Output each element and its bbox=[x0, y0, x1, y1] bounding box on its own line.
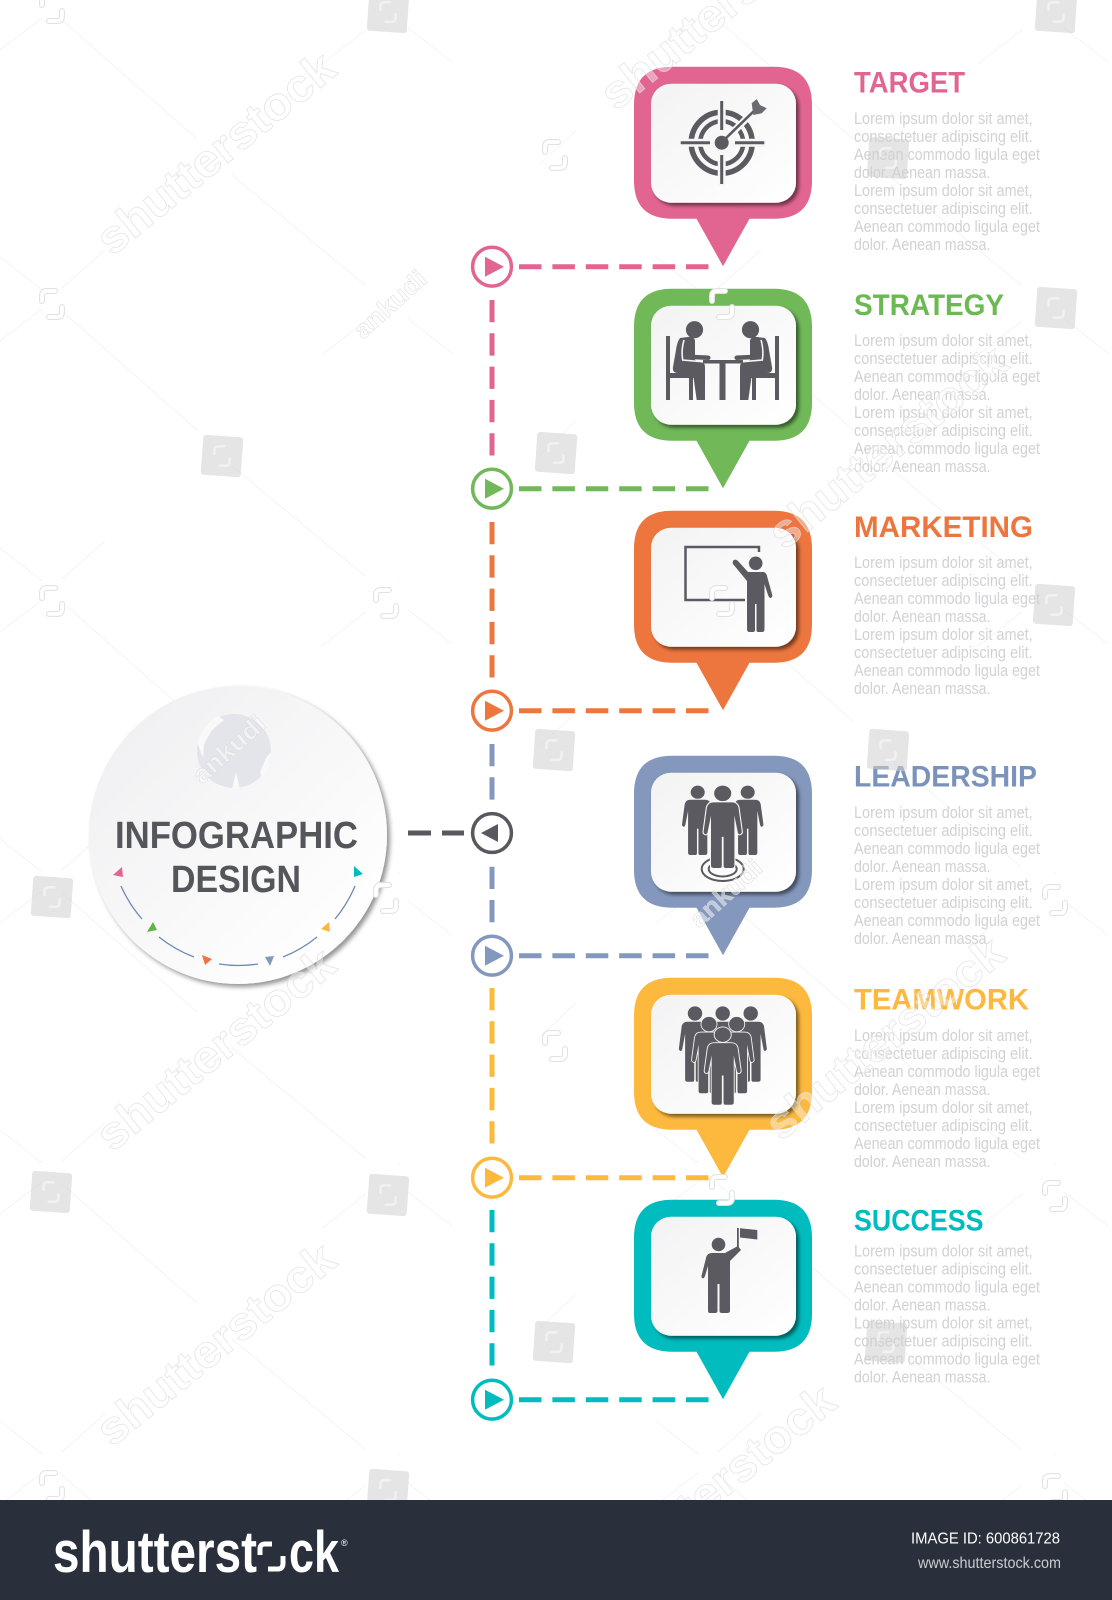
panel: strategy pin bbox=[634, 289, 812, 488]
text: leadership description: Aenean commodo ligula eget bbox=[854, 839, 1040, 858]
text: teamwork description: Lorem ipsum dolor sit amet, bbox=[854, 1026, 1033, 1045]
text: target description: consectetuer adipiscing elit. bbox=[854, 127, 1033, 146]
text: strategy description: Lorem ipsum dolor sit amet, bbox=[854, 331, 1033, 350]
marker: leadership bbox=[473, 936, 511, 975]
watermark: stock text: shutterstock bbox=[86, 40, 346, 265]
icon: team group bbox=[679, 1006, 767, 1105]
text: success description: Lorem ipsum dolor sit amet, bbox=[854, 1242, 1033, 1260]
marker: teamwork bbox=[473, 1158, 511, 1197]
text: success description: Lorem ipsum dolor sit amet, bbox=[854, 1314, 1033, 1332]
footer logo: ® bbox=[341, 1538, 348, 1548]
marker: target bbox=[473, 247, 511, 286]
icon: globe bbox=[197, 714, 271, 789]
marker: marketing bbox=[473, 691, 511, 730]
heading: infographic design: DESIGN bbox=[171, 859, 301, 901]
text: success description: Aenean commodo ligula eget bbox=[854, 1278, 1040, 1296]
icon: presenter at board bbox=[686, 547, 772, 632]
text: target description: dolor. Aenean massa. bbox=[854, 235, 990, 254]
watermark: contributor text: ankudi bbox=[348, 265, 432, 344]
watermark: stock text: shutterstock bbox=[758, 334, 1018, 559]
text: teamwork description bbox=[854, 1026, 1040, 1171]
text: success description: consectetuer adipiscing elit. bbox=[854, 1260, 1033, 1278]
text: leadership description: Lorem ipsum dolor sit amet, bbox=[854, 875, 1033, 894]
icon: leader with team bbox=[682, 786, 763, 881]
text: marketing description: consectetuer adipiscing elit. bbox=[854, 643, 1033, 662]
text: target description: Aenean commodo ligula eget bbox=[854, 217, 1040, 236]
watermark: stock text: shutterstock bbox=[755, 925, 1015, 1150]
text: marketing description: consectetuer adipiscing elit. bbox=[854, 571, 1033, 590]
text: marketing description: Lorem ipsum dolor sit amet, bbox=[854, 625, 1033, 644]
timeline: vertical dashed lines bbox=[490, 300, 494, 1366]
text: marketing description bbox=[854, 553, 1040, 698]
text: target description bbox=[854, 109, 1040, 254]
text: success description bbox=[854, 1242, 1040, 1386]
text: success description: consectetuer adipiscing elit. bbox=[854, 1332, 1033, 1350]
text: target description: Lorem ipsum dolor sit amet, bbox=[854, 109, 1033, 128]
text: teamwork description: dolor. Aenean massa. bbox=[854, 1080, 990, 1099]
text: target description: dolor. Aenean massa. bbox=[854, 163, 990, 182]
icon: target with arrow bbox=[678, 99, 767, 186]
heading: infographic design bbox=[115, 815, 358, 901]
text: target description: Aenean commodo ligula eget bbox=[854, 145, 1040, 164]
text: success description: Aenean commodo ligula eget bbox=[854, 1350, 1040, 1368]
heading: strategy: STRATEGY bbox=[854, 289, 1004, 322]
watermark: stock text: shutterstock bbox=[86, 1231, 346, 1456]
text: target description: Lorem ipsum dolor sit amet, bbox=[854, 181, 1033, 200]
text: marketing description: Aenean commodo ligula eget bbox=[854, 661, 1040, 680]
icon: two people at table bbox=[666, 321, 779, 400]
text: marketing description: Lorem ipsum dolor sit amet, bbox=[854, 553, 1033, 572]
text: success description: dolor. Aenean massa. bbox=[854, 1296, 990, 1314]
text: leadership description: dolor. Aenean massa. bbox=[854, 929, 990, 948]
text: teamwork description: dolor. Aenean massa. bbox=[854, 1152, 990, 1171]
footer logo: ck bbox=[289, 1520, 340, 1585]
arc arrows bbox=[113, 866, 363, 966]
watermark: contributor text bbox=[187, 265, 768, 933]
footer image id: IMAGE ID: 600861728 bbox=[911, 1530, 1060, 1548]
text: marketing description: dolor. Aenean massa. bbox=[854, 607, 990, 626]
heading: infographic design: INFOGRAPHIC bbox=[115, 815, 358, 857]
icon: person with flag bbox=[702, 1228, 757, 1313]
text: marketing description: dolor. Aenean massa. bbox=[854, 679, 990, 698]
panel: central circle bbox=[89, 686, 387, 984]
right person bbox=[737, 321, 779, 400]
panel: teamwork pin bbox=[634, 978, 812, 1177]
connector: dark link to central circle bbox=[408, 830, 464, 836]
text: leadership description: Aenean commodo ligula eget bbox=[854, 911, 1040, 930]
text: target description: consectetuer adipiscing elit. bbox=[854, 199, 1033, 218]
watermark: contributor text: ankudi bbox=[684, 854, 768, 933]
text: strategy description: dolor. Aenean massa. bbox=[854, 457, 990, 476]
text: leadership description: dolor. Aenean massa. bbox=[854, 857, 990, 876]
marker: central link bbox=[473, 814, 511, 852]
text: strategy description: Aenean commodo ligula eget bbox=[854, 367, 1040, 386]
text: teamwork description: consectetuer adipiscing elit. bbox=[854, 1116, 1033, 1135]
text: leadership description: consectetuer adipiscing elit. bbox=[854, 893, 1033, 912]
marker: strategy bbox=[473, 469, 511, 508]
panel: marketing pin bbox=[634, 511, 812, 710]
footer url: www.shutterstock.com bbox=[917, 1555, 1061, 1572]
watermark: stock text: shutterstock bbox=[86, 936, 346, 1161]
circle disc bbox=[89, 686, 387, 984]
text: teamwork description: Aenean commodo ligula eget bbox=[854, 1062, 1040, 1081]
panel: success pin bbox=[634, 1200, 812, 1399]
text: strategy description: Lorem ipsum dolor sit amet, bbox=[854, 403, 1033, 422]
heading: target: TARGET bbox=[854, 67, 965, 100]
text: teamwork description: Lorem ipsum dolor sit amet, bbox=[854, 1098, 1033, 1117]
watermark: contributor text: ankudi bbox=[187, 710, 271, 789]
footer bar bbox=[0, 1500, 1112, 1600]
text: strategy description: consectetuer adipiscing elit. bbox=[854, 421, 1033, 440]
text: leadership description bbox=[854, 803, 1040, 948]
timeline: horizontal dashed lines bbox=[519, 267, 709, 1400]
heading: success: SUCCESS bbox=[854, 1205, 984, 1238]
text: leadership description: Lorem ipsum dolor sit amet, bbox=[854, 803, 1033, 822]
watermark: stock text: shutterstock bbox=[586, 1373, 846, 1598]
text: marketing description: Aenean commodo ligula eget bbox=[854, 589, 1040, 608]
text: success description: dolor. Aenean massa. bbox=[854, 1368, 990, 1386]
heading: teamwork: TEAMWORK bbox=[854, 983, 1029, 1016]
heading: marketing: MARKETING bbox=[854, 511, 1033, 544]
text: strategy description: Aenean commodo ligula eget bbox=[854, 439, 1040, 458]
panel: target pin bbox=[634, 67, 812, 266]
left person bbox=[666, 321, 708, 400]
text: strategy description: consectetuer adipiscing elit. bbox=[854, 349, 1033, 368]
marker: success bbox=[473, 1380, 511, 1419]
text: strategy description: dolor. Aenean massa. bbox=[854, 385, 990, 404]
panel: leadership pin bbox=[634, 756, 812, 955]
heading: leadership: LEADERSHIP bbox=[854, 760, 1037, 793]
footer logo: shutterst bbox=[53, 1520, 257, 1585]
text: teamwork description: consectetuer adipiscing elit. bbox=[854, 1044, 1033, 1063]
text: teamwork description: Aenean commodo ligula eget bbox=[854, 1134, 1040, 1153]
text: leadership description: consectetuer adipiscing elit. bbox=[854, 821, 1033, 840]
text: strategy description bbox=[854, 331, 1040, 476]
